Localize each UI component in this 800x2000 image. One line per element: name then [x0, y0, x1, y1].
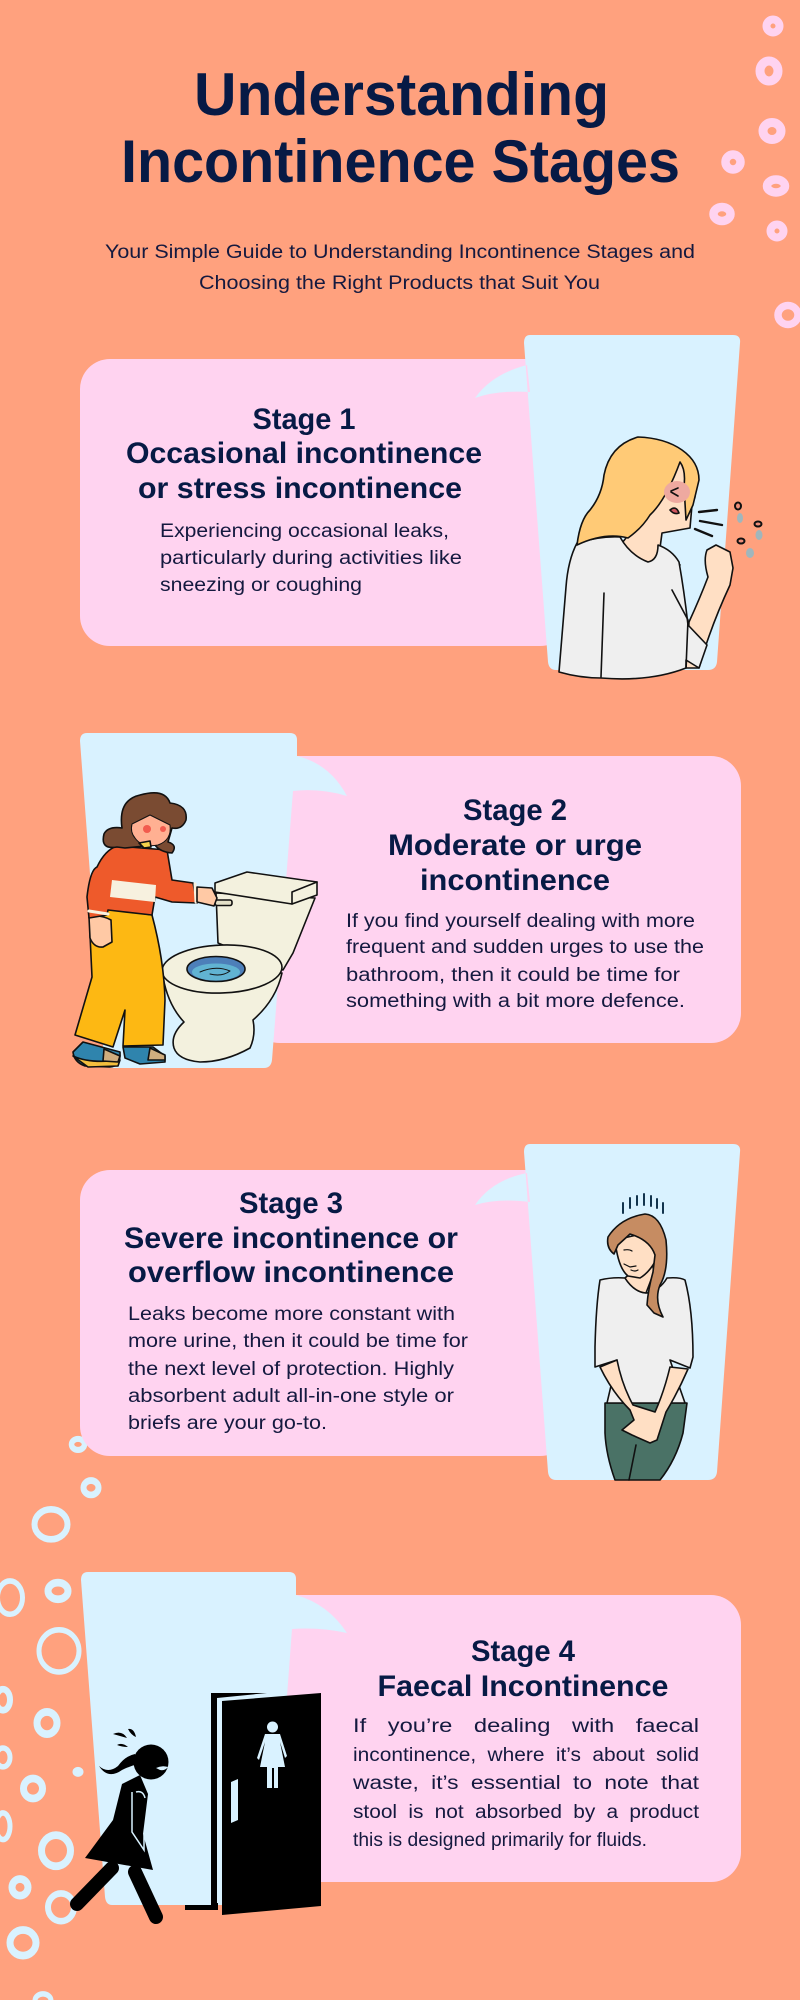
stage 1 body text: particularly during activities like	[160, 548, 462, 569]
stage 1 blue speech shape	[475, 335, 740, 670]
stage 3 body text: Leaks become more constant with	[128, 1304, 455, 1325]
decorative light blue rings	[0, 1439, 98, 2000]
title	[121, 61, 680, 195]
stage 2 body text	[346, 911, 704, 1012]
icon: restroom door	[185, 1693, 321, 1915]
stage 2 heading: Stage 2	[463, 794, 567, 827]
icon: sneezing woman	[559, 437, 762, 679]
stage 2 blue speech shape	[80, 733, 347, 1068]
stage 1 heading	[126, 403, 482, 505]
stage 3 heading: Stage 3	[239, 1187, 343, 1220]
title: Incontinence Stages	[121, 128, 680, 195]
stage 2 body text: frequent and sudden urges to use the	[346, 937, 704, 958]
stage 2 heading: Moderate or urge	[388, 829, 642, 862]
stage 4 heading: Faecal Incontinence	[378, 1670, 668, 1703]
icon: running woman	[77, 1729, 168, 1917]
stage 4 body text: waste, it’s essential to note that	[352, 1773, 700, 1794]
panel: stage 3	[80, 1144, 740, 1480]
stage 3 body text: the next level of protection. Highly	[128, 1359, 455, 1380]
decorative pink rings	[714, 20, 798, 324]
stage 3 heading: Severe incontinence or	[124, 1222, 458, 1255]
stage 1 heading: Occasional incontinence	[126, 437, 482, 470]
subtitle: Choosing the Right Products that Suit You	[199, 273, 600, 294]
stage 2 heading	[388, 794, 642, 897]
stage 4 heading: Stage 4	[471, 1635, 575, 1668]
stage 3 body text	[128, 1304, 469, 1434]
panel: stage 2	[73, 733, 741, 1068]
stage 4 body text: If you’re dealing with faecal	[353, 1716, 699, 1737]
icon: toilet	[161, 872, 317, 1062]
stage 2 body text: If you find yourself dealing with more	[346, 911, 695, 932]
stage 1 body text: Experiencing occasional leaks,	[160, 521, 449, 542]
stage 4 body text: stool is not absorbed by a product	[353, 1802, 700, 1823]
stage 3 body text: absorbent adult all-in-one style or	[128, 1386, 455, 1407]
stage 3 heading	[124, 1187, 458, 1289]
icon: embarrassed woman	[595, 1194, 693, 1480]
stage 4 body text: incontinence, where it’s about solid	[353, 1745, 699, 1766]
icon: girl with flush	[73, 793, 217, 1067]
stage 3 heading: overflow incontinence	[128, 1256, 454, 1289]
stage 2 heading: incontinence	[420, 864, 610, 897]
stage 3 blue speech shape	[475, 1144, 740, 1480]
stage 4 body text: this is designed primarily for fluids.	[353, 1830, 647, 1851]
stage 1 pink box	[80, 359, 570, 646]
subtitle: Your Simple Guide to Understanding Incontinence Stages and	[105, 242, 695, 263]
stage 4 blue speech shape	[81, 1572, 347, 1905]
stage 3 body text: briefs are your go-to.	[128, 1413, 327, 1434]
stage 2 pink box	[250, 756, 741, 1043]
stage 2 body text: something with a bit more defence.	[346, 991, 685, 1012]
stage 1 heading: Stage 1	[252, 403, 356, 436]
icon: female restroom sign	[257, 1722, 287, 1788]
title: Understanding	[194, 61, 609, 128]
stage 4 pink box	[250, 1595, 741, 1882]
stage 1 body text: sneezing or coughing	[160, 575, 362, 596]
stage 4 heading	[378, 1635, 668, 1703]
stage 4 body text	[352, 1716, 700, 1851]
stage 1 body text	[160, 521, 462, 596]
stage 3 pink box	[80, 1170, 570, 1456]
subtitle	[105, 242, 695, 294]
stage 3 body text: more urine, then it could be time for	[128, 1331, 469, 1352]
panel: stage 1	[80, 335, 762, 679]
panel: stage 4	[77, 1572, 741, 1917]
stage 2 body text: bathroom, then it could be time for	[346, 965, 681, 986]
stage 1 heading: or stress incontinence	[138, 472, 462, 505]
